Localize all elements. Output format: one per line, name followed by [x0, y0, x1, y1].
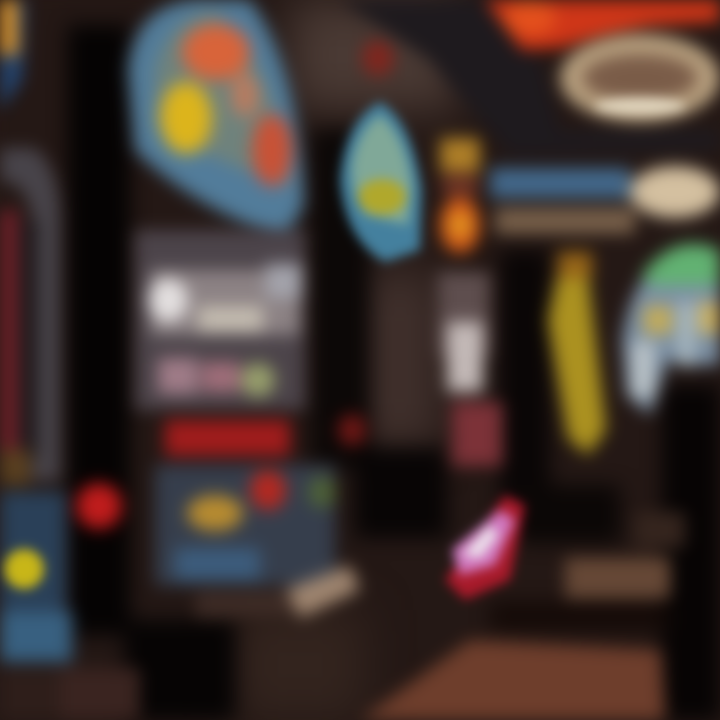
left machine panels	[0, 0, 140, 720]
right arch sign	[622, 244, 720, 415]
glowing pink screen	[445, 495, 525, 600]
small red lamp	[362, 40, 394, 76]
center slot machine lower panel	[155, 414, 366, 618]
icon: red button	[76, 483, 122, 529]
second machine topper	[340, 102, 422, 262]
far left machine	[0, 0, 140, 720]
center slot machine topper	[128, 0, 304, 240]
yellow wall panel	[548, 252, 606, 455]
floor and furniture	[360, 512, 685, 720]
ceiling red light	[485, 0, 720, 50]
center slot machine reels	[135, 230, 305, 410]
vertical orange sign	[440, 138, 480, 253]
right tall machine column	[438, 272, 502, 466]
background glow areas	[235, 0, 460, 720]
ceiling dark beam	[340, 0, 720, 155]
ceiling fixtures	[490, 166, 720, 234]
icon: yellow light	[4, 549, 44, 589]
ceiling ring lamp	[560, 34, 720, 122]
